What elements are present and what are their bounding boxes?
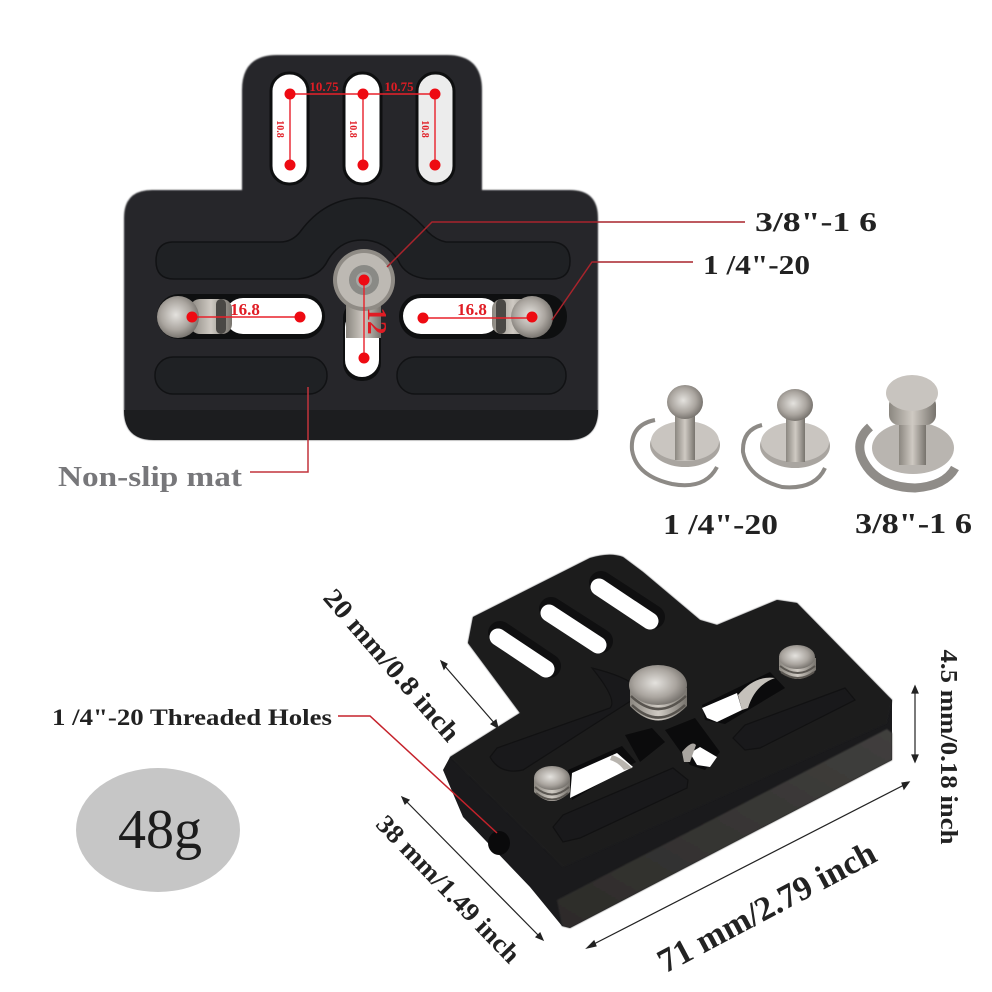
center screw [333, 249, 395, 338]
angled left screw [534, 766, 570, 801]
red dimension values: 16.8 [230, 300, 260, 319]
top face [450, 555, 892, 867]
panel: top view of plate [124, 55, 598, 440]
raised arc and upper non-slip pads [155, 198, 570, 394]
plate body [124, 55, 598, 440]
angled right screw [779, 645, 816, 679]
red dimension values: 10.75 [309, 79, 339, 94]
leader line: threaded holes [338, 716, 497, 833]
label: 1/4 inch: 1 /4"-20 [703, 250, 810, 280]
threaded hole [488, 831, 510, 855]
base silhouette [443, 555, 892, 928]
label: non-slip mat: Non-slip mat [58, 461, 242, 493]
leader line: 1/4 inch screw [552, 262, 693, 320]
red dimension dots [186, 88, 538, 364]
long side lower block [557, 729, 892, 928]
label: 3/8 inch screw: 3/8"-1 6 [855, 508, 972, 540]
angled tab slots: recess [500, 583, 653, 666]
red dimension values: 10.75 [384, 79, 414, 94]
red dimension values [230, 79, 487, 334]
dimension label: 71 mm: 71 mm/2.79 inch [652, 835, 883, 981]
panel: mounting screws [632, 375, 955, 488]
horizontal slots and lower vertical slot [157, 294, 567, 381]
red dimension values: 12 [362, 308, 392, 334]
dimension label: 4.5 mm: 4.5 mm/0.18 inch [935, 650, 961, 844]
dimension label: 20 mm: 20 mm/0.8 inch [317, 583, 466, 747]
red dimension values: 10.8 [347, 120, 358, 138]
weight badge [76, 768, 240, 892]
screw 3/8 inch [860, 375, 955, 488]
label: 1/4 inch screw: 1 /4"-20 [663, 509, 778, 541]
dimension label: 38 mm: 38 mm/1.49 inch [370, 809, 526, 969]
red dimension values: 10.8 [419, 120, 430, 138]
dimension arrow: 71 mm [587, 782, 909, 948]
angled center slot [665, 718, 720, 770]
red dimension values: 10.8 [274, 120, 285, 138]
leader line: non-slip mat [250, 387, 308, 472]
label: threaded holes: 1 /4"-20 Threaded Holes [52, 705, 332, 730]
dimension arrow: 4.5 mm [912, 686, 918, 762]
screw 1/4 inch B [743, 389, 830, 487]
angled pads [490, 668, 855, 842]
panel: angled view of plate [443, 555, 892, 928]
angled tab slots: openings [498, 587, 650, 669]
leader line: 3/8 inch screw [387, 222, 745, 267]
red dimension values: 16.8 [457, 300, 487, 319]
dimension arrow: 20 mm [441, 661, 498, 728]
plate bottom bevel [124, 410, 598, 440]
weight badge: 48g [118, 799, 202, 861]
left screw [157, 296, 232, 338]
red dimension lines [192, 94, 532, 358]
vertical slots [271, 73, 454, 184]
right screw [492, 296, 553, 338]
angled center screw [629, 665, 687, 720]
angled horizontal slots [568, 672, 785, 800]
screw 1/4 inch A [632, 385, 720, 485]
label: 3/8 inch: 3/8"-1 6 [755, 207, 877, 237]
dimension arrow: 38 mm [402, 797, 543, 940]
